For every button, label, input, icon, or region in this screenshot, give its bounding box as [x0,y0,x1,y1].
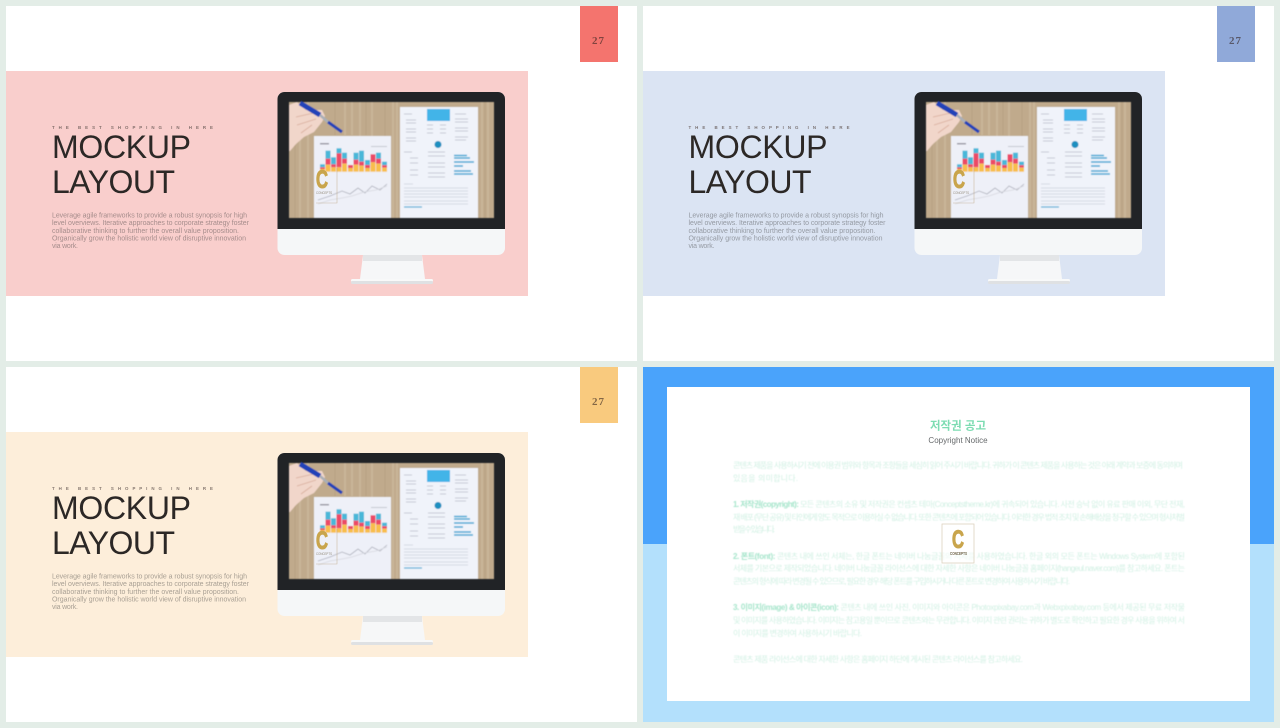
body text: level overviews. Iterative approaches to corporate strategy foster [52,220,250,227]
notice body text: 받을 수 있습니다. [733,524,775,534]
notice heading: 저작권 공고 [930,418,986,432]
body text [52,212,250,250]
body text: via work. [52,604,78,611]
icon: desktop monitor mockup [278,453,505,645]
icon: desktop monitor mockup: C [953,166,965,194]
body text: via work. [52,243,78,250]
icon: desktop monitor mockup: CONCEPTS [953,191,970,195]
page number badge: 27 [592,396,605,408]
small eyebrow heading: T H E B E S T S H O P P I N G I N H E R E [52,486,213,491]
page number badge [580,367,618,423]
panel: cream slide [6,367,637,722]
notice subheading: Copyright Notice [928,436,988,445]
cream band [6,432,528,657]
small eyebrow heading: T H E B E S T S H O P P I N G I N H E R E [688,125,850,130]
logo watermark: CONCEPTS [950,551,967,556]
body text: Leverage agile frameworks to provide a robust synopsis for high [52,212,247,220]
body text: Organically grow the holistic world view of disruptive innovation [52,596,246,604]
notice body text: 재 배포 (무단 공유) 및 타인에게 양도 목적으로 이용하실 수 없습니다. 또한 콘텐츠에 포함되어 있습니다. 이러한 경우 법적 조치 및 손해배상을 청구할 수 있으며 형사처벌 [733,512,1185,522]
title [688,129,828,200]
page number badge [1217,6,1255,62]
notice body text: 콘텐츠 제품 라이선스에 대한 자세한 사항은 홈페이지 하단에 게시된 콘텐츠 라이선스를 참고하세요. [733,654,1023,664]
body text [52,574,250,611]
notice body text: 서체를 기본으로 제작되었습니다. 네이버 나눔글꼴 라이선스에 대한 자세한 사항은 네이버 나눔글꼴 홈페이지(hangeul.naver.com)를 참고하세요. 폰트는 [733,563,1185,573]
icon: desktop monitor mockup [278,92,505,284]
body text: collaborative thinking to further the overall value proposition. [52,589,239,596]
body text: Organically grow the holistic world view of disruptive innovation [52,236,246,242]
panel: pink slide [6,6,637,361]
body text: level overviews. Iterative approaches to corporate strategy foster [688,220,886,227]
icon: desktop monitor mockup: C [316,166,328,194]
logo watermark: C [952,526,964,554]
panel: blue slide [643,6,1274,361]
notice body text: 및 이미지를 사용하였습니다. 이미지는 참고용일 뿐이므로 콘텐츠와는 무관합니다. 이미지 관련 권리는 귀하가 별도로 확인하고 필요한 경우 사용을 위하여 서 [733,615,1185,625]
body text: Organically grow the holistic world view of disruptive innovation [688,236,883,242]
icon: desktop monitor mockup: CONCEPTS [316,552,333,556]
title: LAYOUT [52,164,175,200]
title: MOCKUP [52,129,191,165]
pink band [6,71,528,296]
notice body text: 1. 저작권(copyright): 모든 콘텐츠의 소유 및 저작권은 컨셉츠 테마(Conceptstheme.kr)에 귀속되어 있습니다. 사전 승낙 없이 유료 판매 이외, 무단 전재, [733,499,1185,509]
white notice card [667,387,1250,701]
title [52,490,191,561]
title: LAYOUT [52,525,175,561]
notice body text: 2. 폰트(font): 콘텐츠 내에 쓰인 서체는, 한글 폰트는 네이버 나눔글꼴의 서체를 사용하였습니다. 한글 외의 모든 폰트는 Windows System에 포함된 [733,551,1185,561]
blue band [643,71,1165,296]
title: LAYOUT [688,164,812,200]
logo watermark [942,524,974,563]
body text: collaborative thinking to further the overall value proposition. [688,228,876,235]
icon: desktop monitor mockup: C [316,527,328,555]
page number badge [580,6,618,62]
notice body text: 이 이미지를 변경하여 사용하시기 바랍니다. [733,628,862,638]
notice body text: 콘텐츠의 형식에 따라 변경될 수 있으므로, 필요한 경우 해당 폰트를 구입하시거나 다른 폰트로 변경하여 사용하시기 바랍니다. [733,576,1070,586]
page number badge: 27 [1229,35,1242,47]
page number badge: 27 [592,35,605,47]
title [52,129,191,200]
title: MOCKUP [52,490,191,526]
title: MOCKUP [688,129,828,165]
notice body text: 3. 이미지(image) & 아이콘(icon): 콘텐츠 내에 쓰인 사진, 이미지와 아이콘은 Photoxpixabay.com과 Webxpixabay.com 등에서 제공된 무료 저작물 [733,602,1185,612]
notice body text: 있음을 의미합니다. [733,473,798,483]
notice body text: 콘텐츠 제품을 사용하시기 전에 이용권 범위와 항목과 조항들을 세심히 읽어 주시기 바랍니다. 귀하가 이 콘텐츠 제품을 사용하는 것은 아래 계약과 보증에 동의하며 [733,460,1183,470]
body text: collaborative thinking to further the overall value proposition. [52,228,239,235]
icon: desktop monitor mockup: CONCEPTS [316,191,333,195]
panel: copyright notice slide [643,367,1274,722]
icon: desktop monitor mockup [914,92,1142,284]
body text: Leverage agile frameworks to provide a robust synopsis for high [688,212,884,220]
notice body text [733,460,1185,664]
body text: via work. [688,243,715,250]
body text [688,212,886,250]
body text: level overviews. Iterative approaches to corporate strategy foster [52,581,250,588]
small eyebrow heading: T H E B E S T S H O P P I N G I N H E R E [52,125,213,130]
body text: Leverage agile frameworks to provide a robust synopsis for high [52,574,247,580]
